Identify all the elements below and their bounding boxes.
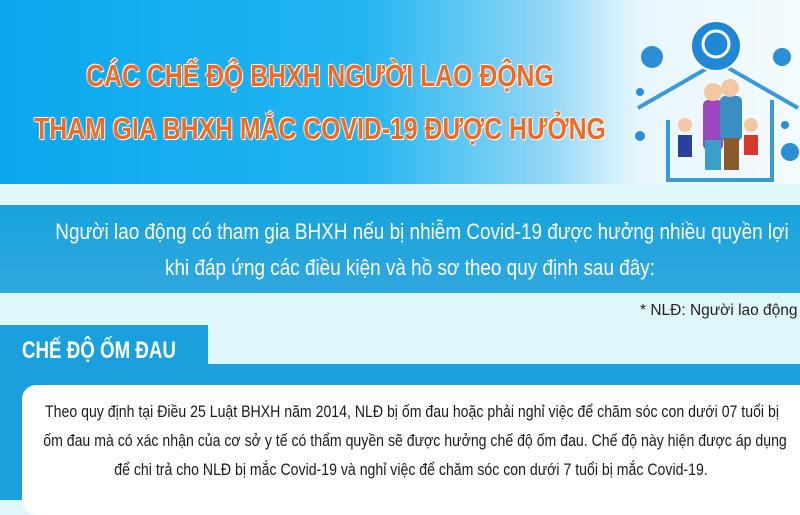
title: THAM GIA BHXH MẮC COVID-19 ĐƯỢC HƯỞNG xyxy=(34,111,606,146)
header background xyxy=(0,0,800,184)
tab heading xyxy=(0,325,208,367)
family xyxy=(703,100,723,150)
section: che do om dau xyxy=(0,325,800,515)
intro band: khi đáp ứng các điều kiện và hồ sơ theo quy định sau đây: xyxy=(165,255,655,280)
text card xyxy=(22,385,800,515)
title: CÁC CHẾ ĐỘ BHXH NGƯỜI LAO ĐỘNG xyxy=(86,58,554,93)
title xyxy=(32,57,606,146)
text card: ốm đau mà có xác nhận của cơ sở y tế có thẩm quyền sẽ được hưởng chế độ ốm đau. Chế độ này hiện được áp dụng xyxy=(43,432,787,450)
footnote: * NLĐ: Người lao động xyxy=(640,302,798,319)
house xyxy=(638,62,798,180)
intro band: Người lao động có tham gia BHXH nếu bị nhiễm Covid-19 được hưởng nhiều quyền lợi xyxy=(55,219,789,244)
illustration: house with family xyxy=(635,20,799,182)
logo xyxy=(691,21,741,71)
text card: để chi trả cho NLĐ bị mắc Covid-19 và nghỉ việc để chăm sóc con dưới 7 tuổi bị mắc Covid-19. xyxy=(114,461,708,479)
text card: Theo quy định tại Điều 25 Luật BHXH năm 2014, NLĐ bị ốm đau hoặc phải nghỉ việc để chăm sóc con dưới 07 tuổi bị xyxy=(45,403,779,421)
intro band xyxy=(0,205,800,293)
tab heading: CHẾ ĐỘ ỐM ĐAU xyxy=(22,337,176,364)
icon: virus particles xyxy=(635,46,799,161)
